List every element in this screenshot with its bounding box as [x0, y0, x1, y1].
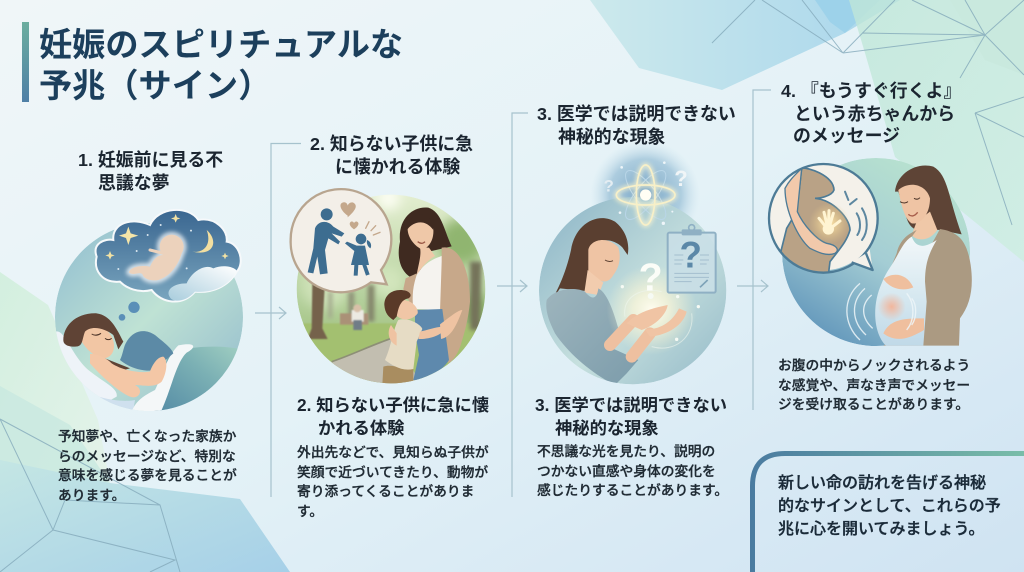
heading 1: 1. 妊娠前に見る不	[78, 150, 223, 170]
body text 3	[537, 444, 728, 498]
arrow 1	[255, 307, 286, 319]
closing callout text	[778, 474, 1001, 538]
title: 予兆（サイン）	[39, 68, 271, 105]
sub-heading 3: 3. 医学では説明できない	[535, 395, 727, 415]
illustration 2: mother hugged by a child in a park	[291, 186, 492, 388]
question mark: ?	[639, 256, 663, 300]
body text 2	[297, 444, 489, 519]
atom halo	[590, 140, 700, 250]
heading 4: という赤ちゃんから	[794, 104, 955, 124]
atom symbol	[604, 161, 688, 225]
body text 3: 不思議な光を見たり、説明の	[537, 444, 715, 459]
closing callout border	[752, 454, 1024, 572]
speech bubble: adult and child icon	[291, 189, 391, 292]
body text 4: な感覚や、声なき声でメッセー	[778, 378, 970, 393]
sub-heading 2: かれる体験	[318, 418, 404, 438]
heading 1: 思議な夢	[98, 172, 170, 192]
flow connector 1	[255, 144, 301, 497]
circle scene	[297, 186, 492, 388]
sub-heading 3: 神秘的な現象	[555, 418, 659, 438]
thought bubbles	[119, 302, 140, 321]
arrow 3	[737, 280, 768, 292]
flow connector 3	[737, 90, 771, 410]
illustration 3: woman with glowing mysterious light	[539, 140, 726, 385]
body text 3: つかない直感や身体の変化を	[537, 464, 716, 479]
heading 1	[78, 150, 223, 192]
heading 2: に懐かれる体験	[335, 156, 460, 176]
body text 4	[778, 358, 970, 412]
embryo	[129, 235, 184, 280]
body text 1	[58, 429, 237, 503]
body text 1: 予知夢や、亡くなった家族か	[58, 429, 236, 444]
heading 4: 4. 『もうすぐ行くよ』	[781, 81, 961, 101]
title	[39, 27, 403, 105]
sub-heading 3	[535, 395, 727, 438]
speech bubble: belly with glowing hand	[769, 163, 878, 275]
sub-heading 2	[297, 395, 489, 438]
body text 1: あります。	[58, 488, 125, 503]
heading 3	[537, 104, 736, 146]
heading 4	[781, 81, 961, 146]
heading 2: 2. 知らない子供に急	[310, 134, 473, 154]
illustration 4: pregnant woman touching her belly	[769, 158, 972, 346]
title accent bar	[22, 22, 29, 102]
body text 2: す。	[297, 504, 323, 519]
flow connector 2	[497, 113, 528, 497]
body text 2: 笑顔で近づいてきたり、動物が	[297, 465, 488, 480]
body text 2: 寄り添ってくることがありま	[297, 484, 474, 499]
atom symbol: ?	[674, 166, 688, 191]
circle scene	[55, 223, 245, 420]
dream cloud	[96, 210, 241, 302]
atom symbol: ?	[604, 177, 614, 196]
sub-heading 2: 2. 知らない子供に急に懐	[297, 395, 489, 415]
heading 3: 3. 医学では説明できない	[537, 104, 736, 124]
body text 3: 感じたりすることがあります。	[537, 483, 728, 498]
body text 4: お腹の中からノックされるよう	[778, 358, 970, 373]
woman	[847, 166, 972, 346]
circle scene	[782, 158, 970, 346]
clipboard: ?	[679, 234, 702, 275]
heading 2	[310, 134, 473, 176]
body text 1: らのメッセージなど、特別な	[58, 449, 236, 464]
clipboard	[668, 225, 716, 293]
illustration 1: sleeping woman dreaming of a baby	[55, 210, 245, 420]
closing callout text: 新しい命の訪れを告げる神秘	[778, 475, 986, 492]
circle scene	[539, 161, 726, 385]
body text 4: ジを受け取ることがあります。	[778, 397, 969, 412]
closing callout text: 兆に心を開いてみましょう。	[778, 521, 985, 538]
heading 3: 神秘的な現象	[558, 126, 665, 146]
heading 4: のメッセージ	[793, 126, 900, 146]
closing callout text: 的なサインとして、これらの予	[778, 498, 1001, 515]
title: 妊娠のスピリチュアルな	[39, 27, 403, 64]
body text 1: 意味を感じる夢を見ることが	[58, 468, 237, 483]
arrow 2	[497, 280, 527, 292]
body text 2: 外出先などで、見知らぬ子供が	[297, 445, 489, 460]
